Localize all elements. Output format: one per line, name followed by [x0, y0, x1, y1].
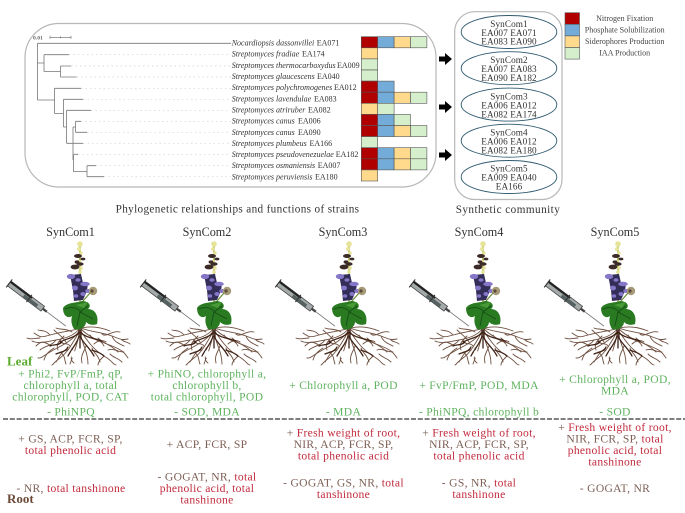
leaf effects: SynCom1: chlorophyll, POD, CAT [12, 390, 129, 403]
SynCom1 ellipse [461, 16, 557, 48]
root effects: SynCom4: NIR, ACP, FCR, SP, [429, 438, 529, 451]
strain labels: Streptomyces canus [232, 128, 295, 137]
root effects: SynCom5: phenolic acid, total [568, 444, 662, 457]
arrow: top [439, 53, 452, 65]
heading: SynCom2: SynCom2 [183, 225, 231, 239]
phylogenetic tree [38, 43, 231, 177]
leaf effects: SynCom5: - SOD [599, 406, 631, 418]
caption: phylogenetic panel: Phylogenetic relationships and functions of strains [116, 204, 359, 216]
SynCom2 ellipse [461, 52, 557, 85]
root effects: SynCom2: phenolic acid, total [160, 482, 254, 495]
legend: IAA Production [599, 48, 650, 58]
leaf effects: SynCom2: - SOD, MDA [174, 406, 240, 418]
leaf effects: SynCom3: + Chlorophyll a, POD [289, 379, 398, 392]
root effects: SynCom4: + Fresh weight of root, [422, 426, 536, 440]
SynCom4 ellipse [461, 124, 557, 157]
strain labels: EA182 [336, 150, 358, 159]
root effects: SynCom3 [283, 426, 404, 501]
panel: phylogenetic tree and functions [25, 24, 436, 187]
root effects: SynCom1: - NR, total tanshinone [16, 482, 126, 495]
function heatmap [361, 37, 427, 181]
strain labels: EA009 [337, 61, 360, 70]
strain labels: Streptomyces lavendulae [232, 94, 312, 103]
SynCom3 ellipse: EA082 EA174 [481, 109, 537, 119]
SynCom1 ellipse: EA007 EA071 [481, 28, 537, 38]
SynCom4 ellipse: EA006 EA012 [481, 136, 537, 146]
root effects: SynCom5: NIR, FCR, SP, total [566, 432, 664, 445]
leaf effects: SynCom1: chlorophyll a, total [24, 379, 117, 392]
root effects: SynCom1: + GS, ACP, FCR, SP, [18, 432, 123, 445]
leaf effects: SynCom1 [12, 368, 129, 418]
leaf effects: SynCom4: + FvP/FmP, POD, MDA [419, 379, 539, 392]
SynCom1 ellipse: SynCom1 [490, 19, 528, 29]
arrow: middle [439, 101, 452, 113]
leaf effects: SynCom2: total chlorophyll, POD [151, 390, 263, 403]
SynCom1 ellipse: EA083 EA090 [481, 37, 537, 47]
SynCom2 ellipse: EA090 EA182 [481, 73, 537, 83]
root effects: SynCom3: NIR, ACP, FCR, SP, [294, 438, 393, 451]
strain labels: Streptomyces pseudovenezuelae [232, 150, 334, 159]
root effects: SynCom4: - GS, NR, total [442, 476, 516, 489]
strain labels: EA006 [298, 116, 321, 126]
leaf effects: SynCom3 [289, 379, 398, 418]
heading: SynCom4: SynCom4 [455, 225, 503, 239]
leaf effects: SynCom2 [148, 368, 266, 418]
icon: plant with syringe 1 [6, 241, 130, 365]
scale bar [33, 36, 71, 42]
arrow: bottom [439, 149, 452, 161]
SynCom5 ellipse [461, 160, 557, 194]
strain labels: EA082 [308, 106, 331, 114]
leaf effects: SynCom4 [419, 379, 539, 418]
strain labels: EA083 [314, 94, 337, 103]
strain labels: Streptomyces osmaniensis [232, 161, 315, 170]
strain labels: Streptomyces plumbeus [232, 139, 307, 148]
leaf effects: SynCom2: + PhiNO, chlorophyll a, [148, 368, 266, 380]
SynCom3 ellipse: SynCom3 [490, 91, 528, 101]
scale bar: 0.01 [33, 36, 43, 42]
root effects: SynCom3: + Fresh weight of root, [287, 426, 400, 440]
strain labels: Streptomyces peruviensis [232, 172, 312, 181]
leaf effects: SynCom2: chlorophyll b, [172, 379, 242, 392]
SynCom4 ellipse: SynCom4 [490, 127, 528, 137]
panel: synthetic community [455, 12, 562, 200]
strain labels: EA012 [334, 83, 357, 92]
strain labels: Nocardiopsis dassonvillei [231, 38, 314, 48]
strain labels: Streptomyces canus [232, 116, 295, 126]
root effects: SynCom3: total phenolic acid [298, 450, 389, 462]
root effects: SynCom4: total phenolic acid [433, 450, 525, 462]
heading: SynCom1: SynCom1 [46, 225, 95, 239]
strain labels: EA071 [317, 38, 339, 48]
strain labels: EA166 [310, 139, 332, 148]
strain labels: Streptomyces glaucescens [232, 72, 315, 81]
leaf effects: SynCom3: - MDA [326, 406, 361, 418]
root effects: SynCom4: tanshinone [452, 488, 506, 501]
root effects: SynCom1: total phenolic acid [25, 444, 116, 457]
icon: plant with syringe 3 [275, 241, 399, 365]
strain labels: Streptomyces polychromogenes [232, 83, 332, 92]
root effects: SynCom4 [422, 426, 536, 501]
SynCom2 ellipse: EA007 EA083 [481, 64, 537, 74]
leaf effects: SynCom4: - PhiNPQ, chlorophyll b [419, 406, 539, 418]
root effects: SynCom2: + ACP, FCR, SP [167, 438, 247, 451]
strain labels: EA180 [315, 172, 338, 181]
root effects: SynCom1 [16, 432, 126, 495]
root effects: SynCom2: tanshinone [180, 493, 234, 506]
root effects: SynCom2 [158, 438, 256, 506]
strain labels: Streptomyces fradiae [232, 50, 300, 59]
legend: Phosphate Solubilization [585, 26, 665, 35]
strain labels [231, 38, 360, 181]
icon: plant with syringe 4 [409, 241, 533, 365]
strain labels: EA090 [298, 128, 321, 137]
SynCom5 ellipse: SynCom5 [490, 164, 528, 174]
leaf effects: SynCom1: - PhiNPQ [47, 406, 95, 418]
root effects: SynCom5: tanshinone [588, 455, 642, 468]
SynCom2 ellipse: SynCom2 [490, 55, 528, 65]
strain labels: EA040 [317, 72, 340, 81]
label: Root: Root [7, 491, 34, 506]
root effects: SynCom5 [558, 421, 672, 495]
legend: Siderophores Production [585, 37, 664, 46]
leaf effects: SynCom5: + Chlorophyll a, POD, [559, 373, 671, 386]
SynCom5 ellipse: EA009 EA040 [481, 172, 537, 182]
heading: SynCom3: SynCom3 [319, 225, 367, 239]
root effects: SynCom5: - GOGAT, NR [580, 482, 650, 495]
leaf effects: SynCom5 [559, 373, 671, 418]
SynCom5 ellipse: EA166 [496, 182, 523, 192]
leaf effects: SynCom1: + Phi2, FvP/FmP, qP, [18, 368, 123, 380]
icon: plant with syringe 2 [140, 241, 264, 365]
SynCom4 ellipse: EA082 EA180 [481, 145, 537, 155]
label: Leaf: Leaf [7, 354, 33, 368]
icon: plant with syringe 5 [544, 241, 668, 365]
root effects: SynCom3: tanshinone [317, 488, 370, 501]
SynCom3 ellipse [461, 88, 557, 121]
root effects: SynCom5: + Fresh weight of root, [558, 421, 672, 434]
legend: Nitrogen Fixation [596, 14, 653, 23]
strain labels: Streptomyces thermocarboxydus [232, 61, 336, 70]
root effects: SynCom2: - GOGAT, NR, total [158, 470, 256, 483]
strain labels: EA007 [318, 161, 340, 170]
strain labels: Streptomyces atriruber [232, 106, 306, 114]
strain labels: EA174 [302, 50, 325, 59]
SynCom3 ellipse: EA006 EA012 [481, 100, 537, 110]
root effects: SynCom3: - GOGAT, GS, NR, total [283, 476, 404, 489]
heading: SynCom5: SynCom5 [591, 225, 639, 239]
legend [565, 13, 665, 59]
caption: synthetic community: Synthetic community [456, 204, 560, 216]
leaf effects: SynCom5: MDA [601, 384, 629, 398]
